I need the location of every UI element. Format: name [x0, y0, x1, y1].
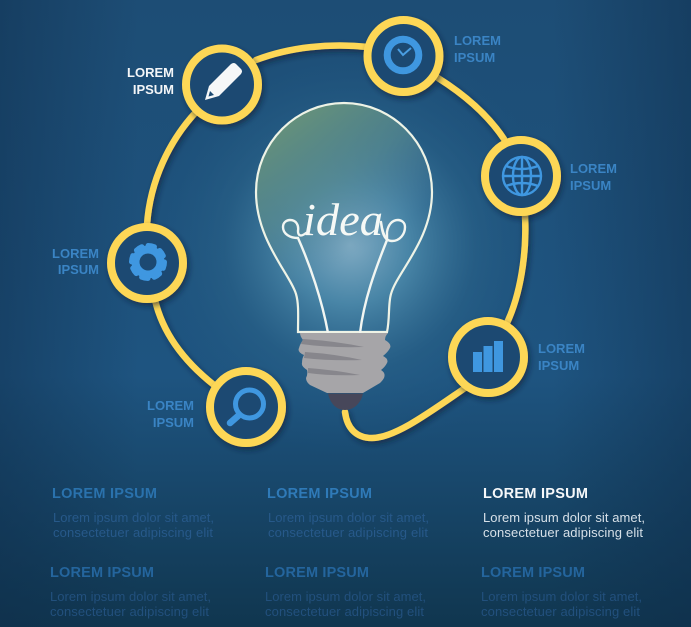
label: search: IPSUM: [153, 415, 194, 430]
text block: row 2 col 1: [50, 565, 211, 619]
text block: row 1 col 2: LOREM IPSUM: [267, 486, 372, 502]
text block: row 1 col 1: consectetuer adipiscing elit: [53, 525, 213, 540]
label: gear: [52, 246, 99, 277]
icon: clock: [387, 39, 419, 71]
light bulb: [256, 103, 432, 410]
text block: row 2 col 2: LOREM IPSUM: [265, 565, 369, 581]
screw base: [299, 333, 390, 393]
node: bar chart: [452, 321, 524, 393]
text block: row 1 col 1: Lorem ipsum dolor sit amet,: [53, 510, 214, 525]
label: gear: IPSUM: [58, 262, 99, 277]
text block: row 1 col 2: consectetuer adipiscing elit: [268, 525, 428, 540]
text block: row 1 col 1: LOREM IPSUM: [52, 486, 157, 502]
bulb tip: [328, 394, 363, 410]
text block: row 2 col 1: Lorem ipsum dolor sit amet,: [50, 589, 211, 604]
label: clock: LOREM: [454, 33, 501, 48]
node: pencil: [186, 48, 258, 120]
icon: bar chart: [473, 341, 503, 372]
text block: row 2 col 2: Lorem ipsum dolor sit amet,: [265, 589, 426, 604]
text block: row 1 col 1: [52, 486, 214, 540]
node: globe: [485, 140, 557, 212]
label: globe: IPSUM: [570, 178, 611, 193]
text block: row 1 col 3: LOREM IPSUM: [483, 486, 588, 502]
label: pencil: [127, 65, 174, 97]
icon: gear: [132, 246, 164, 278]
node: gear: [111, 227, 183, 299]
filaments: [283, 220, 405, 333]
text block: row 2 col 3: consectetuer adipiscing elit: [481, 604, 640, 619]
label: pencil: LOREM: [127, 65, 174, 80]
text block: row 1 col 3: Lorem ipsum dolor sit amet,: [483, 510, 645, 525]
icon: magnifier: [230, 390, 264, 423]
label: search: [147, 398, 194, 430]
text block: row 1 col 2: Lorem ipsum dolor sit amet,: [268, 510, 429, 525]
node: clock: [368, 20, 440, 92]
icon: pencil: [205, 63, 242, 100]
label: globe: LOREM: [570, 161, 617, 176]
label: globe: [570, 161, 617, 193]
bulb glass: [256, 103, 432, 332]
text block: row 2 col 1: consectetuer adipiscing elit: [50, 604, 209, 619]
node: search: [210, 371, 282, 443]
label: clock: IPSUM: [454, 50, 495, 65]
text block: row 2 col 3: [481, 565, 642, 619]
text block: row 2 col 3: LOREM IPSUM: [481, 565, 585, 581]
label: pencil: IPSUM: [133, 82, 174, 97]
text block: row 2 col 2: consectetuer adipiscing elit: [265, 604, 424, 619]
label: bar chart: LOREM: [538, 341, 585, 356]
screw thread shadows: [301, 339, 364, 375]
text block: row 1 col 2: [267, 486, 429, 540]
label: search: LOREM: [147, 398, 194, 413]
text block: row 1 col 3: [483, 486, 645, 540]
label: clock: [454, 33, 501, 65]
label: bar chart: IPSUM: [538, 358, 579, 373]
label: gear: LOREM: [52, 246, 99, 261]
idea lettering: idea: [303, 194, 383, 245]
yellow connecting path: [147, 46, 525, 438]
text block: row 2 col 2: [265, 565, 426, 619]
text block: row 2 col 1: LOREM IPSUM: [50, 565, 154, 581]
text block: row 1 col 3: consectetuer adipiscing elit: [483, 525, 643, 540]
label: bar chart: [538, 341, 585, 373]
icon: globe: [503, 157, 541, 195]
text block: row 2 col 3: Lorem ipsum dolor sit amet,: [481, 589, 642, 604]
